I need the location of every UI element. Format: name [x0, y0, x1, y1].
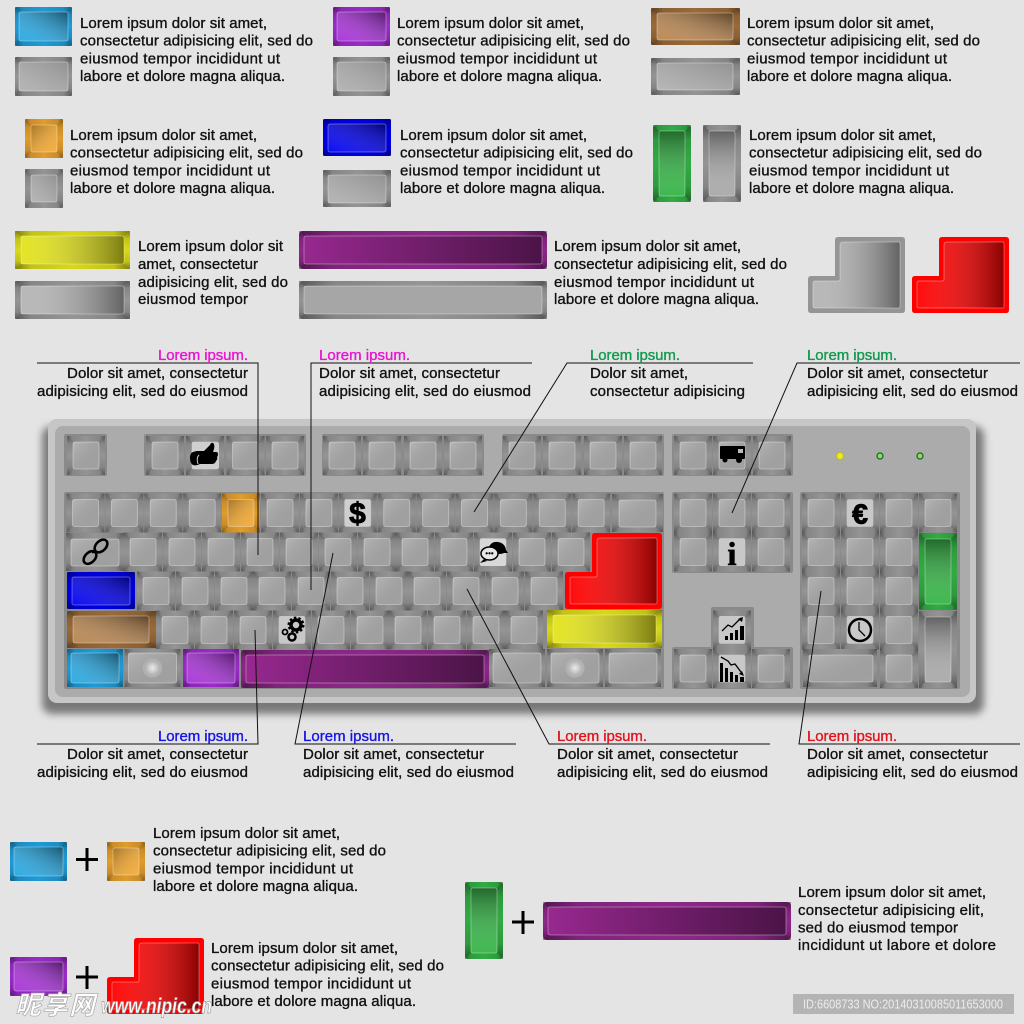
callout text: Dolor sit amet, consectetur	[807, 746, 988, 763]
callout text: Dolor sit amet, consectetur	[557, 746, 738, 763]
long grey key	[299, 281, 547, 319]
keyboard	[42, 419, 984, 714]
callout text: adipisicing elit, sed do eiusmod	[319, 383, 531, 400]
text block: Lorem ipsum dolor sit amet,	[153, 825, 340, 842]
numeric keypad	[802, 494, 957, 688]
legend: orange and grey small keys	[25, 119, 303, 208]
icon: clock	[847, 616, 873, 643]
text block: consectetur adipisicing elit, sed do	[747, 33, 980, 50]
long purple key	[299, 231, 547, 269]
callout: red, third	[467, 589, 770, 781]
grey tall key	[703, 125, 741, 202]
orange key	[25, 119, 63, 158]
red enter key	[565, 533, 662, 609]
callout text	[37, 728, 248, 781]
third key row	[67, 572, 563, 610]
purple key	[10, 957, 67, 996]
text block	[749, 127, 982, 197]
text block	[798, 884, 996, 954]
text block	[747, 15, 980, 85]
callout: blue, second	[295, 553, 516, 781]
text block: labore et dolore magna aliqua.	[397, 68, 602, 85]
legend: yellow and grey keys	[15, 231, 288, 319]
legend: dark blue and grey keys	[323, 119, 633, 207]
callout text	[807, 347, 1018, 400]
long purple key	[543, 902, 791, 940]
callout text	[303, 728, 514, 781]
callout text: Lorem ipsum.	[557, 728, 647, 745]
callout: magenta, top left	[37, 347, 258, 555]
callout text: adipisicing elit, sed do eiusmod	[37, 764, 248, 781]
callout text: Lorem ipsum.	[590, 347, 680, 364]
text block	[138, 238, 288, 308]
icon: euro	[847, 498, 873, 530]
text block: consectetur adipisicing elit, sed do	[80, 33, 313, 50]
text block: labore et dolore magna aliqua.	[554, 291, 759, 308]
callout text	[37, 347, 248, 400]
text block: labore et dolore magna aliqua.	[749, 180, 954, 197]
green tall key	[653, 125, 691, 202]
dark blue key	[323, 119, 391, 156]
callout text: adipisicing elit, sed do eiusmod	[557, 764, 768, 781]
green key	[465, 882, 503, 959]
callout text: Dolor sit amet, consectetur	[807, 365, 988, 382]
text block: Lorem ipsum dolor sit amet,	[554, 238, 741, 255]
icon: dollar: $	[349, 498, 366, 530]
text block: eiusmod tempor incididunt ut	[554, 274, 755, 291]
callout text: Lorem ipsum.	[807, 728, 897, 745]
grey key	[333, 57, 390, 96]
text block: adipisicing elit, sed do	[138, 274, 288, 291]
legend: purple and grey wide keys	[333, 7, 630, 96]
text block: eiusmod tempor incididunt ut	[211, 975, 412, 992]
callout: green, third	[474, 347, 753, 512]
red L-shaped key	[107, 938, 204, 1014]
text block: Lorem ipsum dolor sit amet,	[211, 940, 398, 957]
bottom key row	[67, 649, 661, 688]
callout text: Dolor sit amet, consectetur	[67, 365, 248, 382]
text block: labore et dolore magna aliqua.	[211, 993, 416, 1010]
grey key	[25, 169, 63, 208]
key wells	[64, 434, 960, 689]
text block: eiusmod tempor	[138, 291, 248, 308]
text block	[80, 15, 313, 85]
callout text: Lorem ipsum.	[158, 347, 248, 364]
text block: incididunt ut labore et dolore	[798, 937, 996, 954]
text block: Lorem ipsum dolor sit amet,	[80, 15, 267, 32]
text block: Lorem ipsum dolor sit amet,	[70, 127, 257, 144]
dome marks on bottom keys	[144, 659, 584, 677]
text block: consectetur adipisicing elit, sed do	[749, 145, 982, 162]
combination: blue plus orange	[10, 825, 386, 895]
text block: Lorem ipsum dolor sit amet,	[400, 127, 587, 144]
grey key	[323, 170, 391, 207]
orange key	[107, 842, 145, 881]
fourth key row	[67, 610, 662, 650]
second key row	[66, 532, 590, 572]
grey key	[15, 57, 72, 96]
text block: consectetur adipisicing elit, sed do	[554, 256, 787, 273]
grey key	[15, 281, 130, 319]
text block: labore et dolore magna aliqua.	[400, 180, 605, 197]
callout text	[557, 728, 768, 781]
icon: speech bubbles: •••	[485, 549, 494, 558]
watermark	[15, 990, 212, 1020]
icon: falling chart	[719, 655, 745, 682]
text block	[153, 825, 386, 895]
text block: labore et dolore magna aliqua.	[747, 68, 952, 85]
text block: consectetur adipisicing elit, sed do	[153, 843, 386, 860]
icon: thumbs up	[190, 442, 219, 469]
navigation keys	[674, 494, 790, 688]
text block: eiusmod tempor incididunt ut	[80, 50, 281, 67]
blue key	[10, 842, 67, 881]
text block: eiusmod tempor incididunt ut	[397, 50, 598, 67]
icon: info	[719, 537, 745, 573]
text block: labore et dolore magna aliqua.	[70, 180, 275, 197]
callout text: adipisicing elit, sed do eiusmod	[37, 383, 248, 400]
callout text: adipisicing elit, sed do eiusmod	[807, 764, 1018, 781]
callout text: Lorem ipsum.	[158, 728, 248, 745]
text block: consectetur adipisicing elit, sed do	[397, 33, 630, 50]
text block: consectetur adipisicing elit, sed do	[70, 145, 303, 162]
image id bar	[793, 994, 1014, 1014]
callout text: Dolor sit amet, consectetur	[319, 365, 500, 382]
text block: eiusmod tempor incididunt ut	[747, 50, 948, 67]
icon: euro: €	[852, 498, 868, 530]
keyboard shadow	[42, 426, 984, 714]
text block: labore et dolore magna aliqua.	[153, 878, 358, 895]
text block: eiusmod tempor incididunt ut	[153, 860, 354, 877]
purple key	[333, 7, 390, 46]
plus sign	[512, 911, 534, 934]
watermark: www.nipic.cn	[101, 995, 212, 1018]
plus sign	[76, 966, 98, 989]
callout: magenta, second	[311, 347, 532, 590]
text block: amet, consectetur	[138, 256, 258, 273]
text block: Lorem ipsum dolor sit amet,	[749, 127, 936, 144]
text block: consectetur adipisicing elit, sed do	[211, 958, 444, 975]
text block	[400, 127, 633, 197]
text block: consectetur adipisicing elit, sed do	[400, 145, 633, 162]
legend: red L-shaped key	[912, 237, 1009, 313]
legend: blue and grey wide keys	[15, 7, 313, 96]
callout text: Dolor sit amet, consectetur	[303, 746, 484, 763]
text block	[554, 238, 787, 308]
text block: Lorem ipsum dolor sit	[138, 238, 284, 255]
text block: Lorem ipsum dolor sit amet,	[798, 884, 986, 901]
callout text	[807, 728, 1018, 781]
callout text: adipisicing elit, sed do eiusmod	[807, 383, 1018, 400]
legend: grey L-shaped key	[808, 237, 905, 313]
combination: green plus long purple	[465, 882, 996, 959]
callout text	[319, 347, 531, 400]
icon: dollar	[344, 498, 370, 530]
text block: Lorem ipsum dolor sit amet,	[397, 15, 584, 32]
number key row	[66, 494, 663, 532]
text block: eiusmod tempor incididunt ut	[749, 162, 950, 179]
legend: long purple and grey keys	[299, 231, 787, 319]
callout text	[590, 347, 745, 400]
keyboard deck	[55, 426, 970, 697]
callout text: consectetur adipisicing	[590, 383, 745, 400]
icon: rising chart	[719, 616, 745, 643]
yellow key	[15, 231, 130, 269]
indicator lights	[836, 452, 923, 460]
callout text: Lorem ipsum.	[807, 347, 897, 364]
text block: consectetur adipisicing elit,	[798, 902, 984, 919]
text block	[70, 127, 303, 197]
function key row	[67, 436, 791, 475]
text block	[211, 940, 444, 1010]
grey key	[651, 58, 740, 95]
callout text: Dolor sit amet,	[590, 365, 688, 382]
legend: green and grey tall keys	[653, 125, 982, 202]
callout text: Dolor sit amet, consectetur	[67, 746, 248, 763]
callout text: Lorem ipsum.	[319, 347, 410, 364]
combination: purple plus red	[10, 938, 444, 1014]
text block: Lorem ipsum dolor sit amet,	[747, 15, 934, 32]
callout text: adipisicing elit, sed do eiusmod	[303, 764, 514, 781]
callout: blue, bottom left	[37, 630, 258, 781]
text block: sed do eiusmod tempor	[798, 920, 958, 936]
icon: speech bubbles	[480, 539, 508, 566]
callout text: Lorem ipsum.	[303, 728, 394, 745]
watermark: 昵享网	[15, 990, 99, 1020]
icon: info: i	[727, 537, 737, 573]
brown key	[651, 8, 740, 45]
icon: delivery truck	[720, 446, 745, 463]
callout: red, fourth	[799, 591, 1020, 781]
legend: brown and grey keys	[651, 8, 980, 95]
blue key	[15, 7, 72, 46]
plus sign	[76, 848, 98, 871]
keyboard body	[48, 419, 976, 703]
icon: chain link	[81, 537, 110, 566]
text block: labore et dolore magna aliqua.	[80, 68, 285, 85]
text block: eiusmod tempor incididunt ut	[70, 162, 271, 179]
callout: green, fourth	[732, 347, 1020, 513]
icon: gears	[279, 616, 305, 643]
text block: eiusmod tempor incididunt ut	[400, 162, 601, 179]
text block	[397, 15, 630, 85]
